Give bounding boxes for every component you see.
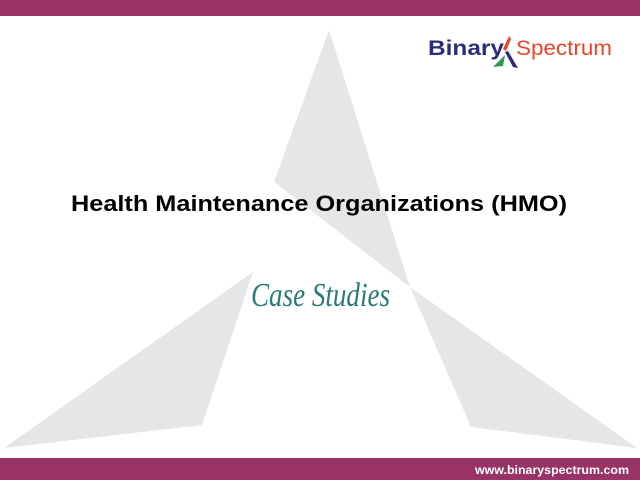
background shape: left triangle xyxy=(4,272,253,448)
footer url: www.binaryspectrum.com xyxy=(474,463,629,477)
subtitle: Case Studies: Case Studies xyxy=(251,277,390,314)
logo: Binary Spectrum: Spectrum xyxy=(516,37,612,60)
top bar xyxy=(0,0,640,16)
background shape: top triangle xyxy=(274,30,410,287)
icon: logo mark xyxy=(493,36,518,68)
background shape: right triangle xyxy=(410,287,637,448)
title: Health Maintenance Organizations (HMO) xyxy=(71,191,567,216)
bottom bar xyxy=(0,458,640,480)
logo: Binary Spectrum: Binary xyxy=(428,37,504,60)
logo: Binary Spectrum xyxy=(428,36,612,68)
